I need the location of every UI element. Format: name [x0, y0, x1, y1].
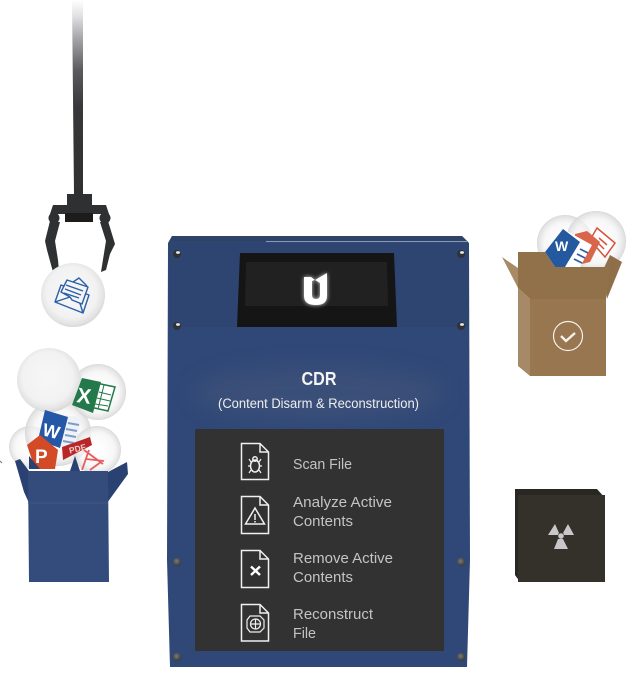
icon: word page: W	[555, 238, 569, 254]
blue box with office files	[9, 348, 128, 582]
icon: open envelope	[55, 278, 89, 313]
box left flap	[502, 257, 530, 298]
icon: x file	[242, 550, 268, 588]
icon: word	[38, 410, 82, 448]
rivets	[173, 250, 465, 661]
step: analyze: Analyze Active	[293, 495, 392, 511]
icon: excel: X	[75, 384, 92, 409]
box left flap	[15, 459, 29, 503]
icon: word page	[545, 229, 592, 267]
black box malicious	[515, 489, 605, 582]
box front flap	[518, 252, 610, 299]
icon: word: W	[41, 420, 62, 443]
icon: excel	[72, 378, 115, 413]
step: analyze: Contents	[293, 514, 353, 530]
screen	[237, 253, 397, 327]
heading: CDR	[302, 369, 336, 389]
panel: steps	[195, 429, 444, 651]
icon: check circle	[554, 322, 582, 350]
box right flap	[107, 462, 128, 503]
box back flaps	[29, 456, 80, 471]
claw rod	[72, 0, 83, 194]
step: reconstruct: Reconstruct	[293, 607, 373, 623]
step: scan file: Scan File	[293, 457, 352, 473]
icon: powerpoint: P	[35, 447, 48, 468]
icon: radiation	[548, 524, 574, 549]
step: analyze	[242, 495, 392, 534]
glass spheres	[9, 348, 126, 474]
icon: warning file	[242, 496, 268, 534]
step: reconstruct: File	[293, 626, 316, 642]
brown box clean output	[502, 211, 626, 376]
email ball	[41, 263, 105, 327]
icon: bug file	[242, 444, 268, 480]
robot claw holding email ball	[41, 0, 115, 327]
icon: powerpoint page	[570, 231, 600, 267]
icon: pdf: PDF	[68, 442, 87, 456]
step: remove: Remove Active	[293, 551, 393, 567]
step: remove: Contents	[293, 570, 353, 586]
box top and side	[515, 489, 605, 582]
icon: pdf	[62, 437, 92, 460]
subtitle: (Content Disarm & Reconstruction)	[218, 396, 419, 411]
step: reconstruct	[242, 604, 373, 642]
box back flap	[604, 255, 622, 299]
step: scan file	[242, 444, 352, 480]
box side	[518, 288, 530, 376]
icon: pdf page	[590, 228, 615, 257]
icon: acrobat mark	[82, 450, 104, 470]
CDR machine	[167, 236, 470, 667]
machine body	[167, 236, 470, 667]
box front	[28, 471, 109, 582]
icon: powerpoint	[27, 435, 58, 469]
left stray mark	[0, 461, 2, 463]
icon: shield file	[242, 604, 268, 641]
box front	[518, 495, 605, 582]
glass spheres	[537, 211, 626, 271]
step: remove	[242, 550, 393, 588]
box front	[530, 299, 606, 376]
claw gripper	[45, 194, 115, 272]
icon: logo	[304, 273, 327, 305]
